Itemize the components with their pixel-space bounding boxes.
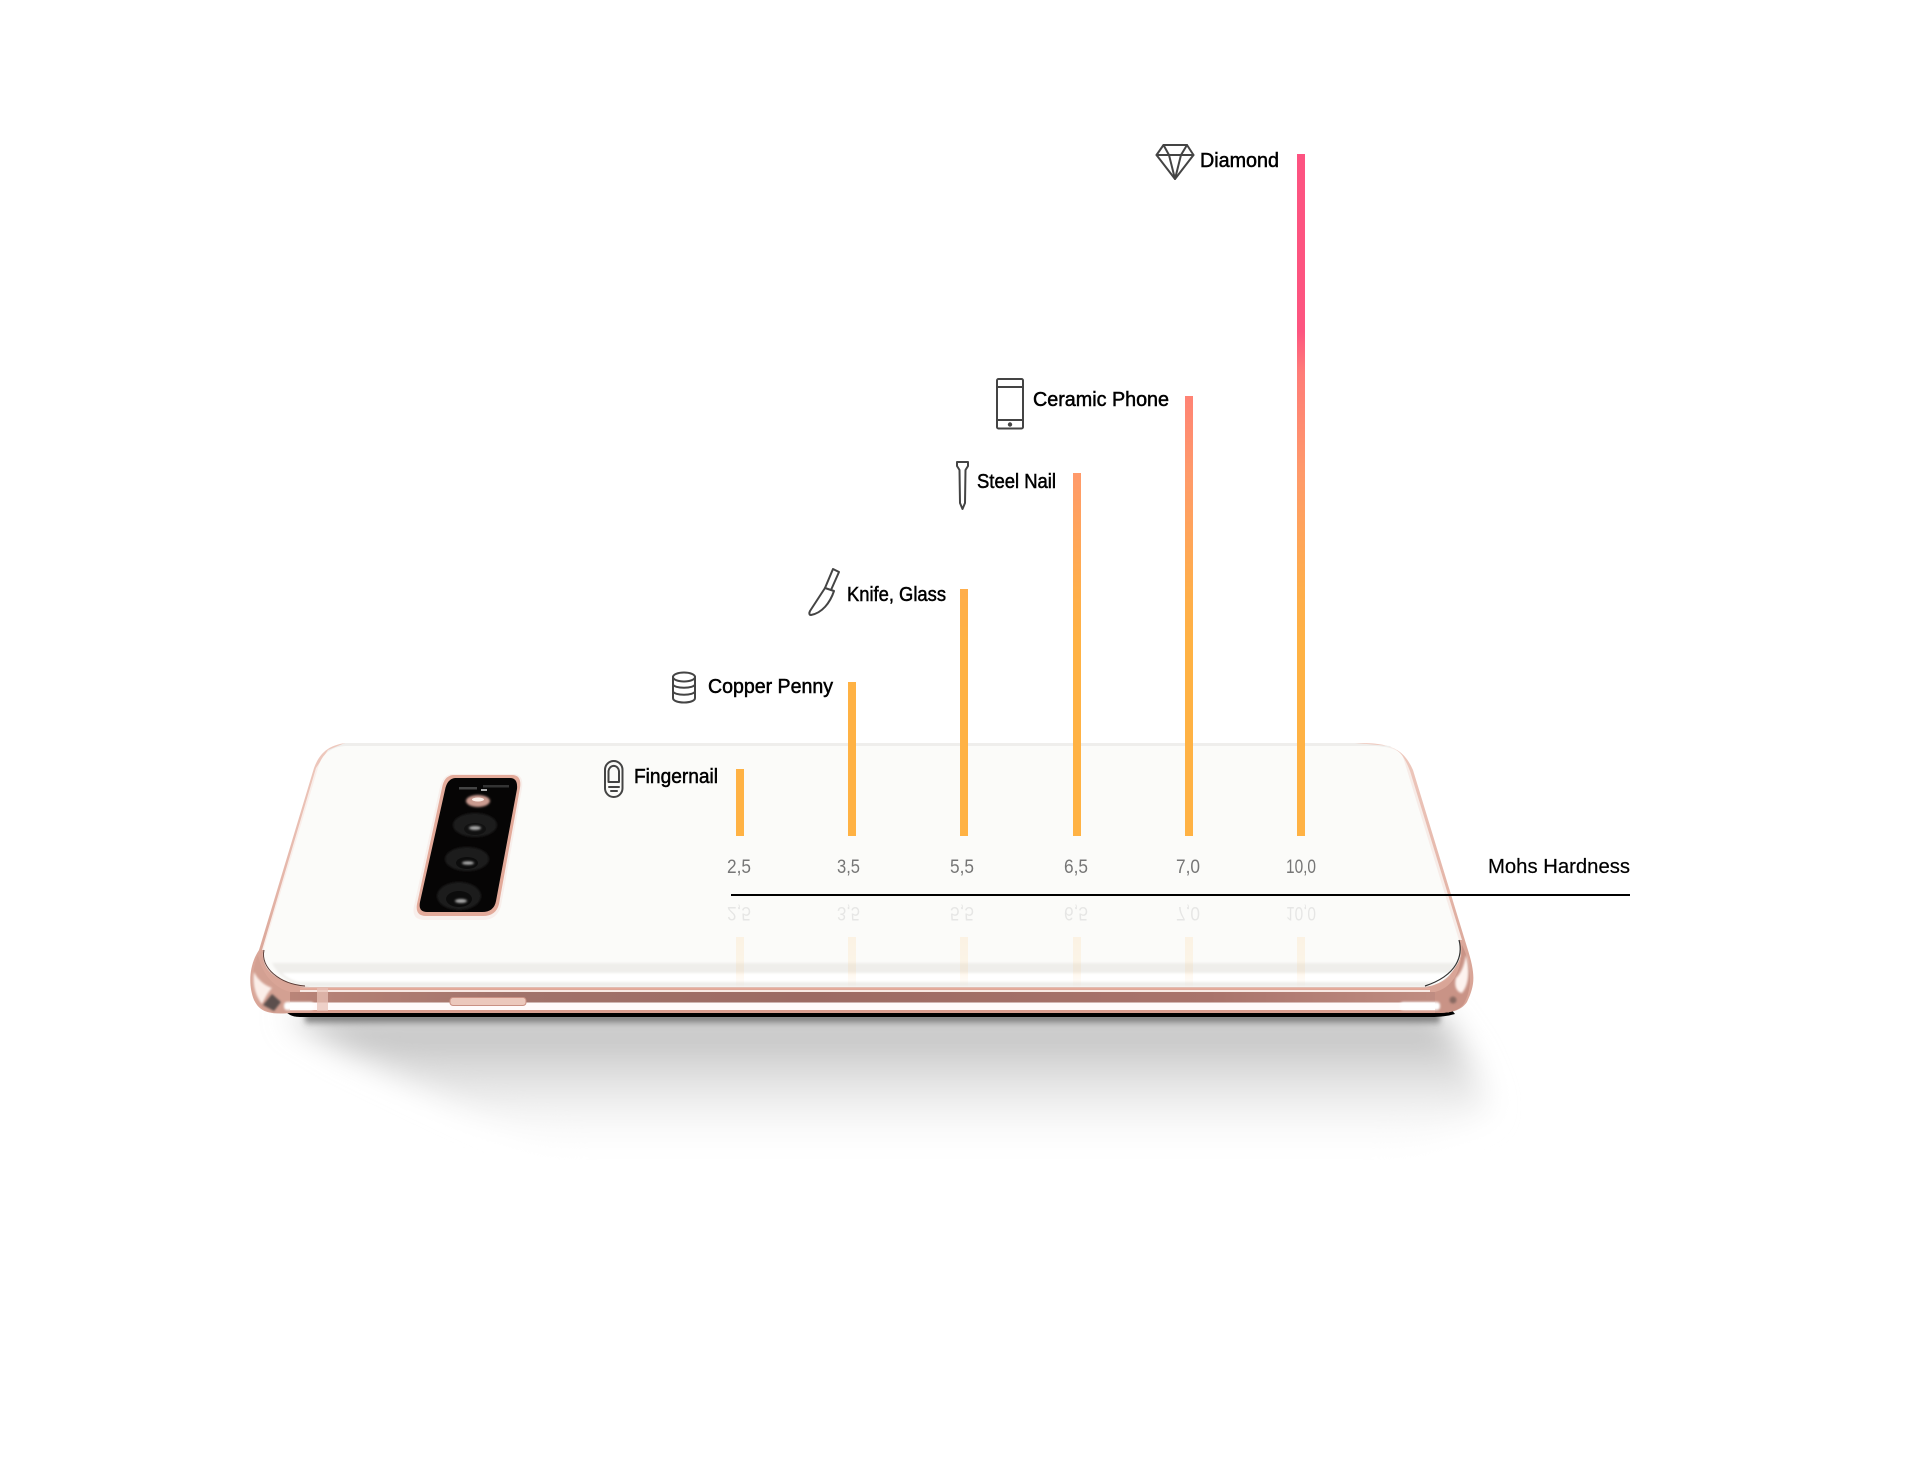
bar chart bars <box>736 154 1305 836</box>
axis values: 6,5 <box>1064 857 1088 878</box>
item: Steel Nail: Steel Nail <box>977 471 1056 493</box>
left seam stripe <box>317 988 328 1011</box>
icon: nail <box>957 462 968 509</box>
axis values: 5,5 <box>950 857 974 878</box>
item: Ceramic Phone <box>997 379 1169 428</box>
lens 2 <box>445 847 489 871</box>
item: Fingernail <box>605 761 718 797</box>
item: Copper Penny <box>673 672 833 702</box>
white inner stripe of left rim <box>262 750 328 950</box>
white band <box>284 1002 1442 1010</box>
icon: coin stack <box>673 672 695 702</box>
flash <box>466 795 490 807</box>
side button <box>450 998 526 1006</box>
item: Fingernail: Fingernail <box>634 766 718 788</box>
white inner stripe of right rim <box>1385 747 1462 940</box>
icon: knife <box>809 569 839 615</box>
icon: diamond <box>1156 145 1194 179</box>
left corner <box>253 955 290 1013</box>
axis values: 7,0 <box>1176 857 1200 878</box>
axis values: 3,5 <box>837 857 860 878</box>
item: Diamond <box>1156 145 1279 179</box>
axis values: 10,0 <box>1286 857 1316 878</box>
rose gold frame <box>250 743 1473 1013</box>
mirrored axis values: 5,5 <box>950 902 974 923</box>
lens 3 <box>437 882 481 910</box>
frame lines <box>300 988 1430 989</box>
phone body <box>250 743 1473 1017</box>
axis values: 2,5 <box>727 857 751 878</box>
item: Ceramic Phone: Ceramic Phone <box>1033 389 1169 411</box>
sensors <box>459 785 509 791</box>
black underside <box>283 1008 1455 1017</box>
icon: smartphone <box>997 379 1023 428</box>
pale top edge <box>325 743 1400 756</box>
lens 1 <box>453 813 497 837</box>
axis values <box>727 857 1316 878</box>
mirrored axis values: 6,5 <box>1064 902 1088 923</box>
item: Diamond: Diamond <box>1200 150 1279 172</box>
item: Copper Penny: Copper Penny <box>708 676 833 698</box>
bar reflections <box>736 937 1305 989</box>
mirrored axis values: 3,5 <box>837 902 860 923</box>
item: Steel Nail <box>957 462 1056 509</box>
phone shadow <box>285 1015 1490 1150</box>
axis line <box>731 894 1630 896</box>
item: Knife, Glass <box>809 569 946 615</box>
camera module <box>413 774 522 920</box>
icon: fingernail <box>605 761 622 797</box>
glass bottom highlight strips <box>272 963 1456 987</box>
axis title: Mohs Hardness <box>1488 856 1630 878</box>
right corner <box>1435 945 1470 1013</box>
dark rose band <box>290 992 1440 1002</box>
mirrored axis values: 2,5 <box>727 902 751 923</box>
mirrored axis values: 10,0 <box>1286 902 1316 923</box>
mirrored axis values: 7,0 <box>1176 902 1200 923</box>
mirrored axis values <box>727 902 1316 923</box>
item: Knife, Glass: Knife, Glass <box>847 584 946 606</box>
back glass <box>263 746 1461 987</box>
